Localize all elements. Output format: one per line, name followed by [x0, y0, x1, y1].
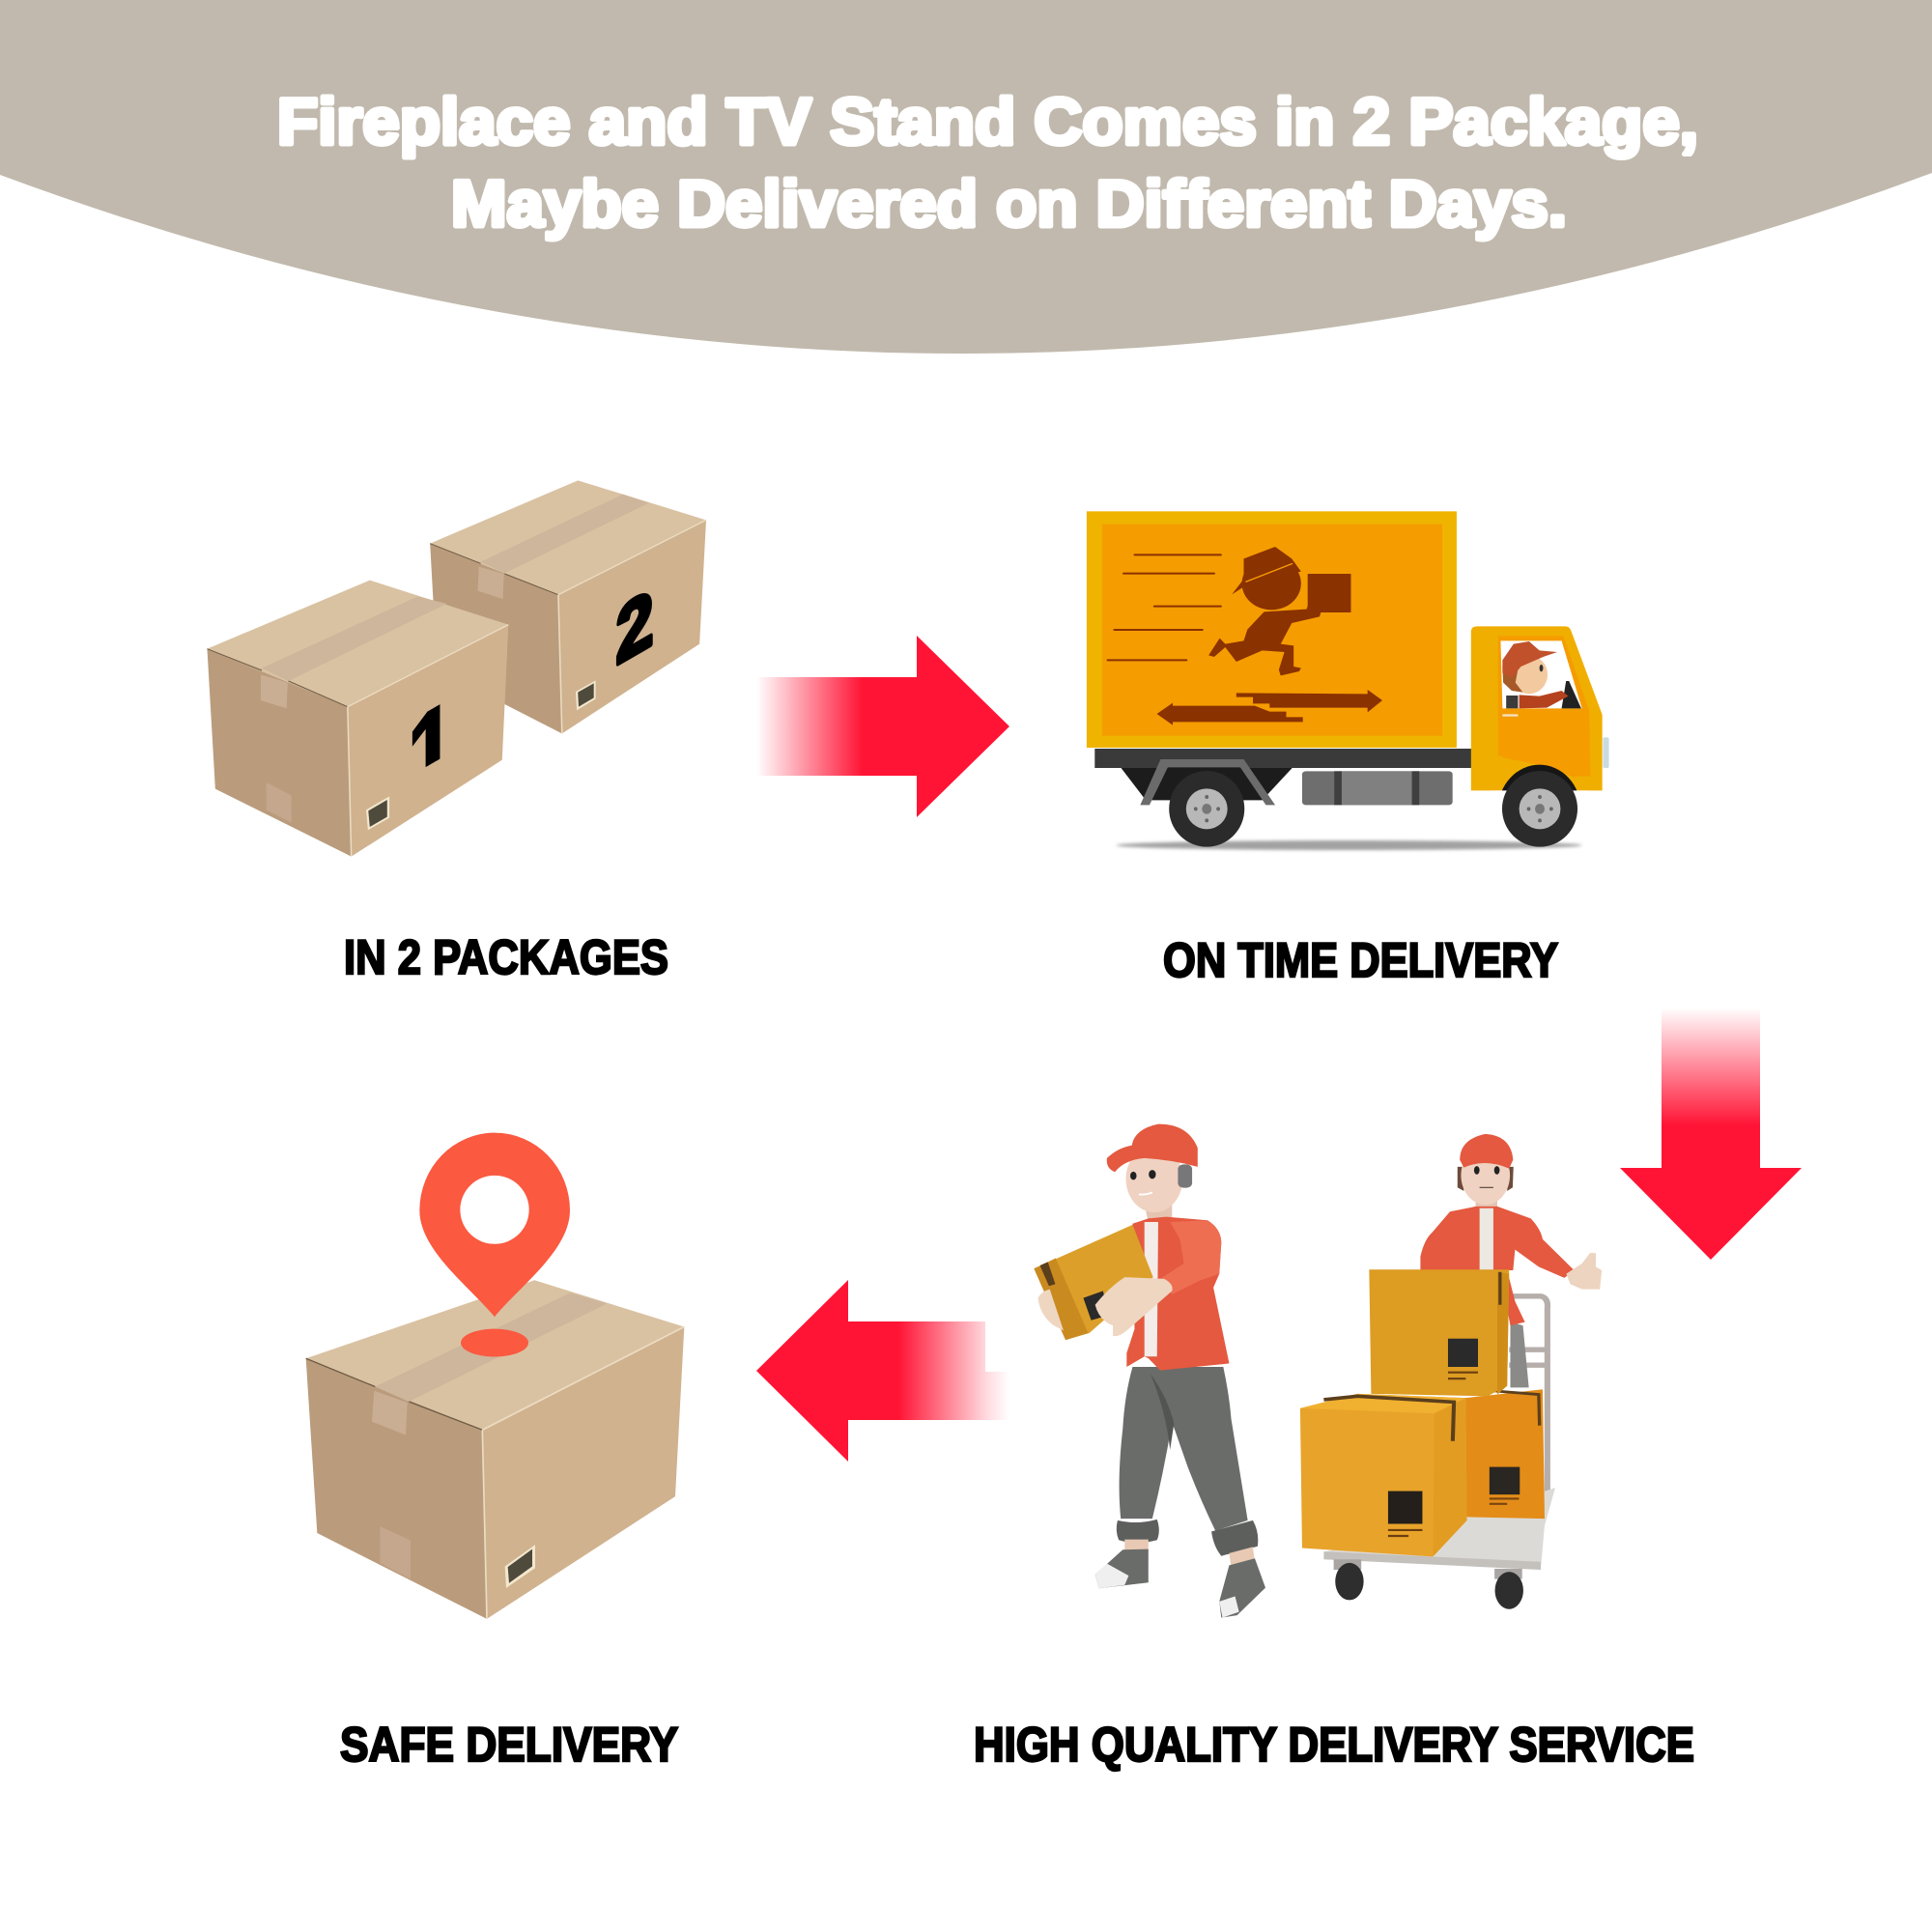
stacked boxes — [1300, 1269, 1545, 1556]
box 2 — [430, 480, 706, 733]
arrow: right — [756, 636, 1009, 817]
speed lines — [1108, 554, 1221, 660]
digit 1: 1 — [409, 678, 453, 810]
title — [277, 85, 1698, 241]
icon: delivery truck — [1087, 511, 1609, 857]
fuel tank — [1302, 771, 1453, 805]
front wheel — [1502, 771, 1577, 847]
label: in 2 packages: IN 2 PACKAGES — [344, 930, 668, 984]
road arrows emblem — [1157, 690, 1382, 725]
worker with box — [1034, 1124, 1265, 1618]
driver — [1502, 641, 1581, 708]
title: Fireplace and TV Stand Comes in 2 Package, — [277, 85, 1698, 158]
digit 2: 2 — [616, 572, 653, 682]
label: high quality delivery service: HIGH QUALITY DELIVERY SERVICE — [974, 1718, 1694, 1772]
arrow: down — [1620, 1008, 1802, 1260]
title: Maybe Delivered on Different Days. — [451, 167, 1567, 241]
running courier emblem — [1208, 547, 1350, 675]
rear wheel — [1169, 771, 1244, 847]
icon: delivery workers with trolley — [1034, 1124, 1602, 1618]
box 1 — [207, 581, 508, 857]
cargo box — [1087, 511, 1457, 748]
header banner — [0, 0, 1932, 354]
cab — [1471, 626, 1609, 857]
icon: two numbered cardboard boxes — [207, 480, 706, 857]
label: on time delivery: ON TIME DELIVERY — [1163, 933, 1558, 987]
truck shadow — [1116, 840, 1582, 850]
location pin — [419, 1133, 570, 1357]
box — [306, 1280, 684, 1619]
arrow: left — [756, 1280, 1009, 1462]
chassis — [1094, 749, 1472, 805]
icon: cardboard box with location pin — [306, 1133, 684, 1619]
trolley — [1323, 1296, 1555, 1609]
label: safe delivery: SAFE DELIVERY — [340, 1718, 678, 1772]
worker behind trolley — [1420, 1134, 1602, 1387]
